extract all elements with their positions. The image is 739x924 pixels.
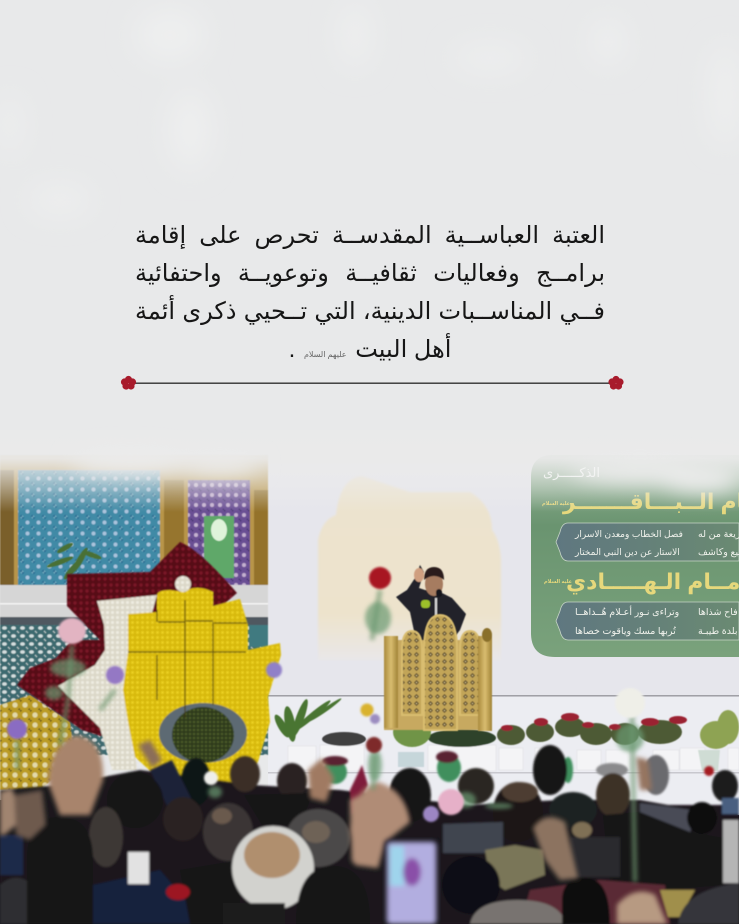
fern plant [272,697,343,743]
purple flowers [322,729,496,747]
red badge [166,884,190,900]
dark hair bottom right [562,878,610,924]
verse panel one [556,523,739,561]
verse panel two: وتراءى نـور أعـلام هُــداهــا [575,605,679,618]
plants and pots row [272,697,739,771]
maroon jacket [520,880,670,924]
main Arabic paragraph: العتبة العباســية المقدســة تحرص على إقامة [135,222,605,249]
white planter boxes [288,745,739,771]
black coat [180,860,240,924]
left rose [121,376,136,390]
dark head near phone [442,856,500,914]
golden lectern [384,615,492,731]
verse panel one: الاستار عن دين النبي المختار [574,547,680,557]
mirror opening in palm [159,703,247,763]
hand of flowers sculpture [17,542,281,792]
main Arabic paragraph [135,222,605,363]
variegated plant in centre [393,717,432,747]
fog wisps [70,450,739,492]
microphones [421,600,430,608]
tall dark hair figure [27,817,93,924]
verse panel two: فاح شذاها [698,607,738,618]
plant beside hand sculpture [46,541,102,581]
white pattern shawl [723,820,739,883]
gray back lower right [678,883,739,924]
main Arabic paragraph: فــي المناســبات الدينية، التي تــحيي ذكرى أئمة [135,298,605,325]
crowd edge backing so blurred edges stay dark [0,800,739,924]
crowd base mass [0,770,739,924]
right rose [608,376,624,390]
poinsettias [497,710,739,771]
main Arabic paragraph: أهل البيت عليهم السلام . [289,336,451,363]
mustard cloth [660,890,695,917]
gray head lower left [0,878,38,924]
navy sleeve left [0,835,23,875]
dark head foreground [296,866,370,924]
green leaves [45,602,644,809]
gray sweater [640,803,693,835]
navy sleeve raised [150,760,192,812]
dark phone on the right [722,798,739,814]
yellow flower hand [123,588,281,792]
verse panel two: تُربها مسك وياقوت خصاها [575,626,676,637]
dark red rose backing [17,542,237,737]
verse panel one: فصل الخطاب ومعدن الاسرار [574,529,683,539]
verse panel two [556,602,739,640]
navy coat [93,870,206,924]
verse panel two: بلدة طيبـة [698,626,738,637]
mid heads [89,772,350,867]
dark coats [244,793,313,825]
main Arabic paragraph: برامــج وفعاليات ثقافيــة وتوعويــة واحتفائية [135,260,605,287]
beige coat [485,845,545,890]
caps and masks [322,751,573,784]
honorific icon: عليه السلام [544,579,572,585]
head [425,572,443,596]
flower heads [7,567,714,822]
photo: shrine wall [268,450,739,810]
green centre [172,707,234,763]
press card [128,852,149,884]
gray head bottom [470,900,566,924]
fog overlay over photo [0,430,739,512]
beige calligraphy arch panel [318,476,501,660]
photo: mosaic wall left [0,455,268,790]
shirt line [435,598,437,616]
plaid shirt [443,822,503,853]
bald man with white hair [223,826,314,924]
honorific icon: عليه السلام [542,501,570,507]
raised hands [0,735,667,924]
crowd of worshippers [0,735,739,924]
speaker at lectern [396,565,466,650]
striped jacket [570,837,620,877]
white flower at top [175,576,191,592]
divider with rose ends [121,376,624,390]
hand [414,568,424,582]
raised arm maroon [350,765,368,815]
poster small top word: الذكـــــرى [543,465,600,481]
finger gaps [128,600,247,718]
back row heads [181,745,738,842]
dark seated figures right [603,812,723,890]
hair [424,567,444,580]
white flowers layer [58,595,157,770]
blurred flowers held by the crowd [7,567,714,882]
suit jacket and raised arm [396,565,466,650]
raised phone [385,840,438,924]
green information poster [531,455,739,657]
stems [17,590,635,882]
